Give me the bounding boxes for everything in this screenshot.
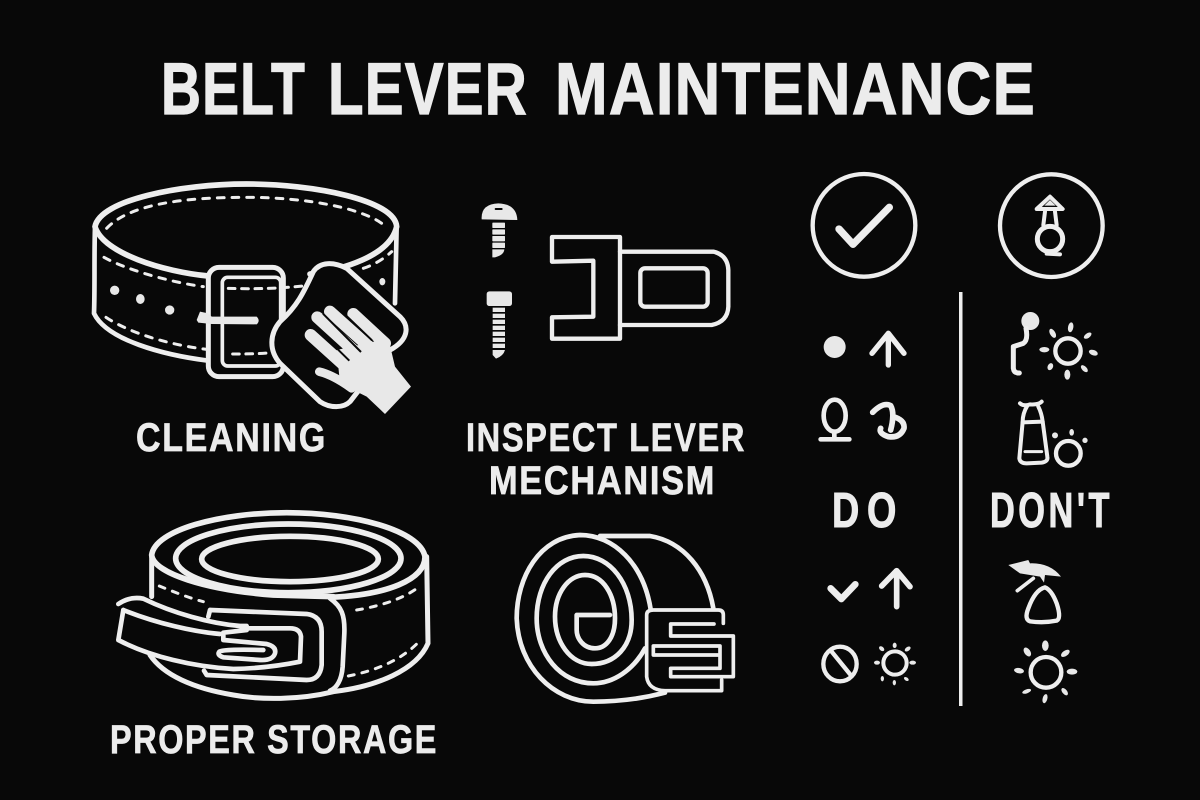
divider between do and don't — [959, 292, 962, 706]
label: inspect lever mechanism — [466, 416, 746, 503]
icon: figure — [1013, 312, 1039, 373]
buckle — [647, 610, 733, 691]
title: LEVER — [328, 49, 528, 130]
icon: belt being cleaned with cloth and hand — [94, 184, 411, 414]
lever plate — [552, 237, 728, 339]
buckle and tongue — [118, 598, 344, 691]
belt holes — [110, 278, 385, 315]
icon: spray bottle — [1008, 560, 1061, 622]
icon: up arrow — [872, 333, 904, 365]
stitching — [159, 586, 418, 676]
top screw — [482, 203, 517, 257]
icon: dot — [824, 336, 846, 358]
icon: screws and lever plate — [482, 203, 728, 359]
label: do: DO — [832, 484, 904, 538]
buckle — [197, 267, 303, 377]
label: inspect lever mechanism: INSPECT LEVER — [466, 416, 746, 460]
label: inspect lever mechanism: MECHANISM — [489, 459, 716, 503]
label: don't: DON'T — [990, 484, 1113, 538]
belt body outline — [95, 184, 397, 276]
icon: prohibited sign — [823, 647, 857, 681]
icon: don't circle with lever glyph — [1000, 174, 1103, 277]
title: MAINTENANCE — [555, 49, 1036, 130]
outer wall — [150, 557, 428, 698]
icon: small check — [831, 584, 855, 599]
icon: sun — [1039, 322, 1099, 380]
icon: up arrow — [882, 571, 910, 607]
icon: bottle — [1019, 402, 1047, 463]
icon: large sun — [1014, 640, 1077, 704]
label: cleaning: CLEANING — [136, 416, 327, 460]
don't icons upper — [1013, 312, 1099, 466]
coil rings — [152, 513, 425, 597]
title — [161, 49, 1036, 130]
stitching — [104, 197, 392, 349]
label: proper storage: PROPER STORAGE — [110, 718, 438, 762]
don't icons lower — [1008, 560, 1077, 704]
icon: coiled belt in storage — [118, 513, 428, 698]
do icons lower — [823, 571, 916, 685]
icon: pin — [821, 400, 849, 439]
icon: small sun — [1052, 429, 1088, 466]
bottom screw — [487, 291, 512, 359]
icon: small sun — [874, 643, 916, 685]
icon: rolled belt — [517, 535, 733, 702]
icon: curled arrow — [873, 405, 904, 437]
belt side walls — [94, 227, 397, 361]
do icons upper — [821, 333, 904, 439]
title: BELT — [161, 49, 306, 130]
hand — [311, 311, 411, 414]
cloth — [272, 264, 406, 407]
icon: do check circle — [813, 174, 915, 277]
spiral — [517, 535, 713, 702]
